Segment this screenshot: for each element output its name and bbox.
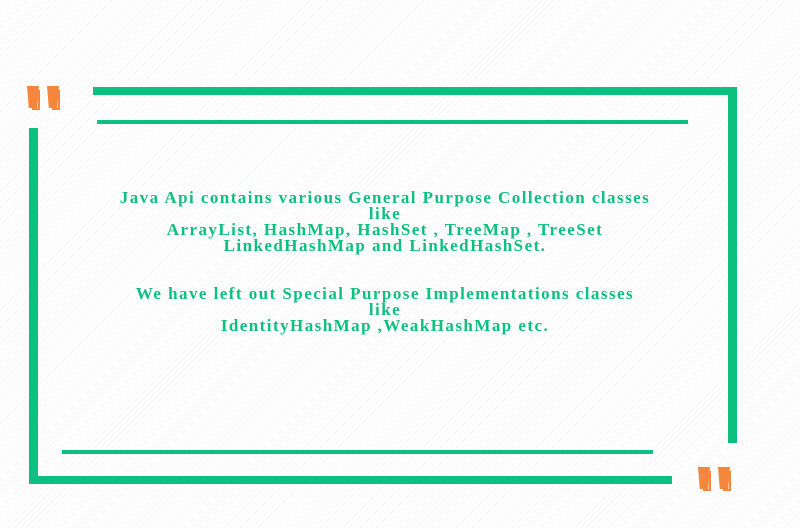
text block: general purpose	[120, 188, 650, 255]
frame: top bar	[93, 87, 737, 95]
text block: general purpose: ArrayList, HashMap, HashSet , TreeMap , TreeSet	[167, 220, 603, 239]
frame: left bar	[29, 128, 38, 484]
icon: quote mark bottom-right	[698, 467, 731, 491]
frame: inner top line	[97, 120, 688, 124]
frame: bottom bar	[29, 476, 672, 484]
text block: general purpose: like	[369, 204, 401, 223]
text block: general purpose: Java Api contains various General Purpose Collection classes	[120, 188, 650, 207]
icon: quote mark top-left	[27, 86, 60, 110]
text block: special purpose: We have left out Special Purpose Implementations classes	[136, 284, 634, 303]
frame: right bar	[728, 87, 737, 443]
text block: general purpose: LinkedHashMap and LinkedHashSet.	[224, 236, 546, 255]
text block: special purpose	[136, 284, 634, 335]
text block: special purpose: IdentityHashMap ,WeakHashMap etc.	[221, 316, 549, 335]
text block: special purpose: like	[369, 300, 401, 319]
frame: inner bottom line	[62, 450, 653, 454]
